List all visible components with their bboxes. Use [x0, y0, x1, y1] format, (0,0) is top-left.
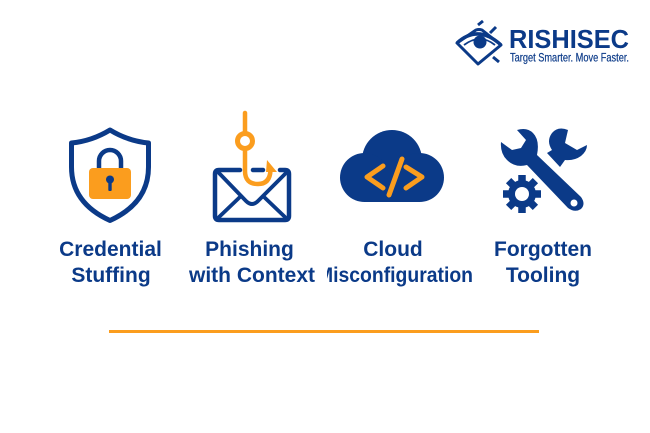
icon: shield with padlock: [72, 130, 148, 220]
orange divider: [109, 330, 539, 333]
label: Forgotten: [494, 238, 592, 261]
label: Credential: [59, 238, 162, 261]
icon: cloud with code: [340, 130, 444, 202]
icon: eye logo: [457, 21, 501, 64]
icon: envelope with hook: [215, 113, 289, 220]
item: forgotten tooling: Tooling: [506, 264, 580, 287]
item: cloud misconfiguration: Misconfiguration: [317, 264, 473, 287]
item: phishing with context: [188, 113, 315, 287]
item: credential stuffing: [59, 130, 162, 287]
brand name: RISHISEC: [509, 26, 629, 54]
label: Phishing: [205, 238, 294, 261]
item: forgotten tooling: [494, 129, 592, 287]
item: phishing with context: with Context: [188, 264, 315, 287]
label: Cloud: [363, 238, 423, 261]
icon: wrenches and gear: [501, 129, 587, 213]
logo: Rishisec: [457, 21, 629, 64]
item: cloud misconfiguration: [317, 130, 473, 287]
item: credential stuffing: Stuffing: [71, 264, 151, 287]
